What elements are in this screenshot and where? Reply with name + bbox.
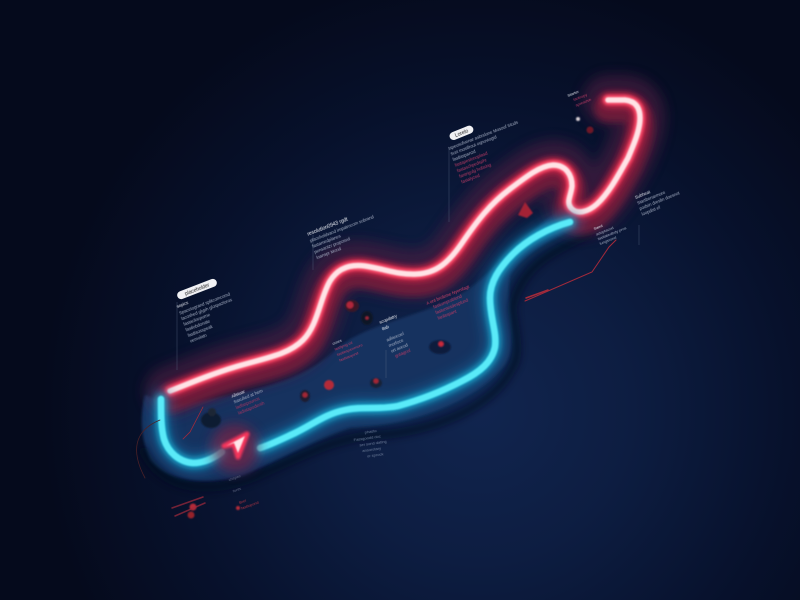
text block 4: fantropy <box>572 92 588 102</box>
text block 12: chspec <box>228 473 241 482</box>
text block 5: podsin dreslin doesnot <box>639 190 681 211</box>
text block 9: 8ab <box>381 324 390 331</box>
text block 7: ladlaspounos <box>235 396 260 410</box>
text block 9: gotagcul <box>394 348 411 358</box>
label pill 1 <box>176 278 218 300</box>
text block 1 <box>176 285 242 344</box>
text block 2: fastamedplanes <box>311 233 341 249</box>
text block 6 <box>593 215 629 246</box>
leader lines <box>177 148 639 378</box>
text block 3: Sort mostfrout oqnoviogid <box>450 134 498 157</box>
text block 4 <box>567 85 593 109</box>
text block 11: ser sond dating <box>359 439 387 447</box>
text block 5 <box>634 179 683 217</box>
text block 7 <box>231 383 268 416</box>
text block 7: Allstuar <box>231 389 246 399</box>
text block 11: ansorotary <box>362 446 381 453</box>
text block 1: Spacetogrand splitcomcomd <box>178 291 231 316</box>
text block 1: lacoshed glyph glospazloros <box>181 297 233 321</box>
text block 11: phasto <box>364 428 378 435</box>
text block 12 <box>228 470 259 511</box>
text block 10: fastiomproblond <box>432 293 463 310</box>
arrow head icon <box>211 424 259 472</box>
text block 8 <box>332 331 366 363</box>
text block 8: lastlyng cd <box>334 340 353 351</box>
text block 9: morfoce <box>388 337 405 348</box>
text block 3: Ispeusofvenar asbrslone Mosouf Studs <box>448 120 519 151</box>
text block 10 <box>426 284 477 323</box>
text block 8: fastlespenmoro <box>336 342 364 357</box>
text block 9: ort aocod <box>390 342 409 354</box>
label pill 1: placeholder <box>184 282 211 297</box>
text block 10: fastumesdesplund <box>435 297 469 315</box>
text block 4: spreadsb <box>575 96 593 108</box>
red ribbon shadow and halo <box>170 100 640 399</box>
small red markers on the platform <box>188 117 594 518</box>
text block 12: fastlopond <box>240 500 259 511</box>
text block 6: lungsrond <box>599 235 617 246</box>
platform: blue base between the lines <box>142 210 592 487</box>
text block 2: loanspr Mond <box>316 246 342 260</box>
text block 11: or sprock <box>367 451 384 459</box>
text block 1: fastacloepurne <box>183 312 211 327</box>
text block 10: A ont broleme Nyemlagt <box>426 284 471 306</box>
text block 5: Startbenarmore <box>636 190 666 206</box>
text block 9 <box>379 313 412 359</box>
text block 2 <box>307 207 382 260</box>
text block 6: fastlatedbdy pros <box>597 225 627 241</box>
red accent rule lines <box>137 240 616 516</box>
cyan line glow <box>161 222 570 463</box>
text block 6: Saed <box>593 223 603 231</box>
text block 4: Starter <box>567 89 580 98</box>
text block 1: fastlobdonate <box>185 318 211 332</box>
text block 1: oemolatn <box>189 332 208 344</box>
text block 8: cures <box>332 338 342 346</box>
text block 3: fastalyzed <box>460 173 481 185</box>
label pill 2 <box>448 124 475 141</box>
text block 1: fastlaosspeak <box>187 324 214 338</box>
text block 8: fastlasqurst <box>338 350 360 363</box>
text block 9: adlaocoel <box>386 331 405 343</box>
text block 7: Saxulted at hem <box>233 388 264 404</box>
label pill 2: Lorelo <box>454 128 470 139</box>
text block 11 <box>352 427 389 460</box>
text block 9: scopdatry <box>379 313 398 325</box>
text block 3 <box>448 120 532 185</box>
text block 3: fastaschpedsphr <box>456 157 488 173</box>
text block 3: fastapeslonoplasd <box>454 150 489 168</box>
text block 5: loopdist ef <box>641 204 662 217</box>
text block 7: ladistapodenth <box>237 400 266 416</box>
text block 3: fastlaspanzd <box>452 149 477 162</box>
text block 3: fantrigulg hubsing <box>458 162 492 179</box>
text block 10: fanlaspant <box>437 308 458 321</box>
text block 2: pensantzr proposed <box>313 236 351 254</box>
text block 2: resolution0943 rgdt <box>307 217 349 238</box>
text block 12: fonts <box>232 486 242 493</box>
text block 5: Subheat <box>634 189 652 200</box>
text block 11: Fassgoodd doc <box>353 433 381 442</box>
text block 2: placeholdvand impatrocom sobrand <box>309 214 375 243</box>
text block 6: adoptacod <box>595 225 614 237</box>
text block 1: sepics <box>176 300 189 309</box>
text block 12: Brel <box>238 498 247 505</box>
